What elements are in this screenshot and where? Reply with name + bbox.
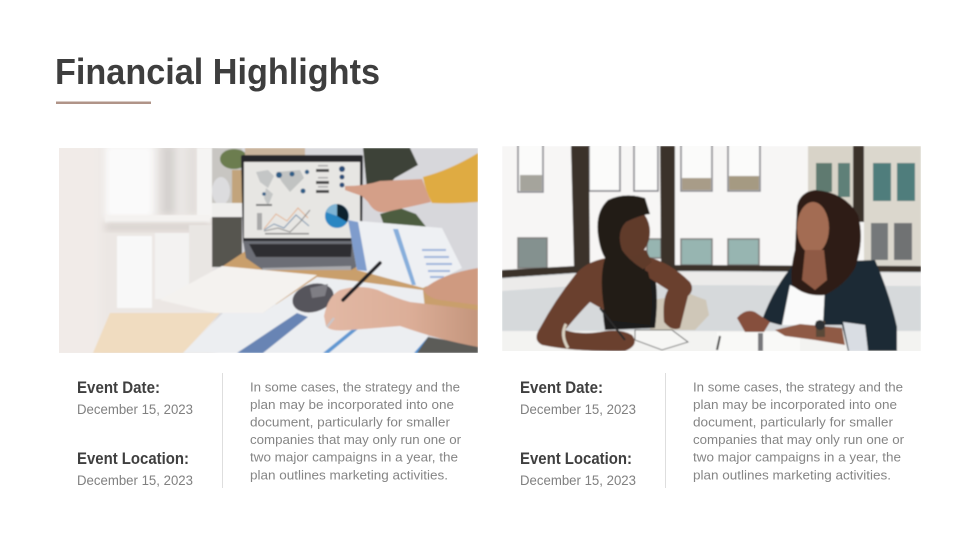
title: Financial Highlights: [55, 51, 380, 92]
notebooks: [635, 330, 688, 350]
left woman: [602, 260, 657, 330]
description text: companies that may only run one or: [693, 432, 905, 447]
event date value: December 15, 2023: [77, 402, 193, 417]
right document: [348, 220, 462, 288]
description text: plan may be incorporated into one: [693, 397, 897, 412]
pointing hand and yellow sleeve: [345, 179, 431, 212]
photo: laptop with financial dashboard and hands over documents: [50, 140, 478, 360]
description text: In some cases, the strategy and the: [693, 380, 903, 394]
event location value: December 15, 2023: [520, 473, 636, 488]
description text: document, particularly for smaller: [693, 414, 894, 430]
lower windows: [518, 238, 759, 268]
photo: two women talking at a table by a window: [502, 140, 921, 352]
title underline: [56, 102, 151, 104]
sill and wall: [502, 271, 921, 335]
left bracelet and pen: [563, 324, 568, 348]
description text: companies that may only run one or: [250, 432, 462, 447]
panel: right event details: [520, 373, 905, 488]
calculator: [292, 282, 334, 314]
event location value: December 15, 2023: [77, 473, 193, 488]
buildings: [808, 146, 854, 208]
description text: document, particularly for smaller: [250, 414, 451, 430]
event date label: Event Date:: [77, 379, 160, 397]
description text: two major campaigns in a year, the: [250, 450, 458, 464]
event date value: December 15, 2023: [520, 402, 636, 417]
description text: plan outlines marketing activities.: [693, 468, 891, 482]
plants: [362, 148, 418, 185]
event location label: Event Location:: [77, 450, 189, 468]
dashboard: [256, 165, 349, 234]
description text: In some cases, the strategy and the: [250, 380, 460, 394]
event location label: Event Location:: [520, 450, 632, 468]
shelf: [212, 148, 242, 206]
description text: [693, 380, 905, 482]
description text: two major campaigns in a year, the: [693, 450, 901, 464]
right woman: [762, 260, 897, 351]
laptop: [241, 155, 363, 243]
beige building windows: [816, 163, 832, 192]
event date label: Event Date:: [520, 379, 603, 397]
pen-writing hand: [324, 287, 478, 347]
upper windows: [518, 140, 760, 192]
chair: [650, 294, 709, 330]
description text: [250, 380, 462, 482]
panel: left event details: [77, 373, 462, 488]
description text: plan may be incorporated into one: [250, 397, 454, 412]
window frames: [571, 146, 590, 268]
table: [222, 251, 478, 311]
description text: plan outlines marketing activities.: [250, 468, 448, 482]
bottom left table and papers: [93, 313, 220, 353]
table: [502, 331, 921, 352]
